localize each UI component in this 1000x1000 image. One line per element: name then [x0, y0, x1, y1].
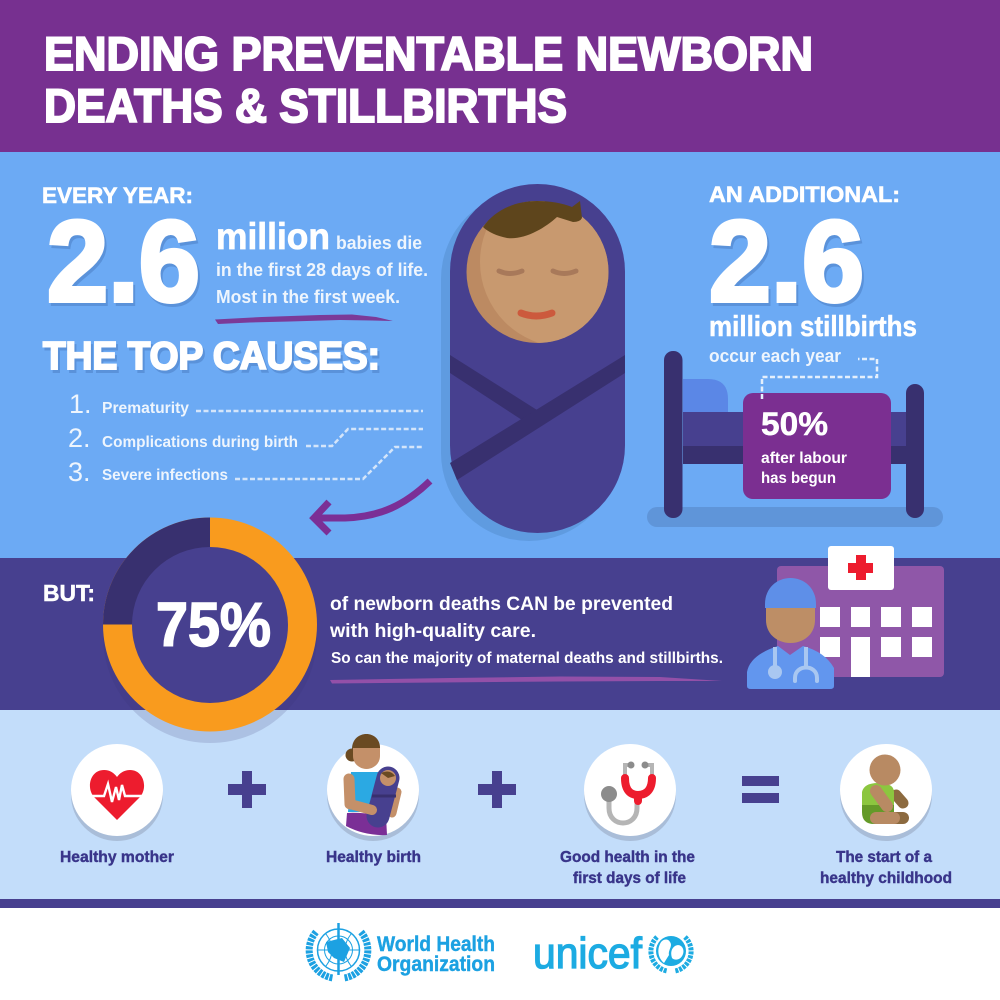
item: healthy mother	[60, 744, 174, 866]
title: DEATHS & STILLBIRTHS	[44, 79, 567, 132]
item: good health: first days of life	[573, 870, 686, 887]
panel: footer logos	[309, 923, 691, 978]
icon: plus	[478, 771, 516, 808]
icon: mother and baby	[346, 734, 397, 835]
text block: stillbirths	[709, 311, 917, 366]
icon: bed	[647, 351, 943, 527]
cause 1: 1.	[69, 389, 92, 419]
cause 2: Complications during birth	[102, 434, 298, 451]
icon: equals	[742, 776, 779, 803]
logo: WHO wordmark: Organization	[377, 953, 495, 976]
cause 1: Prematurity	[102, 400, 189, 417]
item: healthy childhood	[820, 744, 952, 887]
cause 3	[68, 447, 423, 487]
big number: 2.6 million: 2.6	[709, 198, 864, 326]
logo: WHO wordmark: World Health	[377, 933, 495, 956]
icon: swaddled baby	[441, 184, 625, 541]
cause 1	[69, 389, 423, 419]
text block: babies die: million	[216, 216, 330, 257]
cause 2: 2.	[68, 423, 91, 453]
heading: every year: EVERY YEAR:	[42, 183, 193, 208]
brush underline	[215, 314, 393, 324]
item: good health	[560, 744, 695, 887]
logo: WHO emblem	[309, 923, 368, 978]
panel: prevention band	[43, 518, 944, 743]
panel: healthy childhood equation	[60, 734, 952, 887]
cause 3: 3.	[68, 457, 91, 487]
heading: an additional: AN ADDITIONAL:	[709, 182, 900, 207]
item: healthy birth: Healthy birth	[326, 849, 421, 866]
brush underline	[330, 676, 722, 684]
cause 2	[68, 423, 423, 453]
callout: 50 percent: after labour	[761, 450, 847, 467]
logo: WHO wordmark	[377, 933, 495, 976]
text block: prevention: of newborn deaths CAN be prevented	[330, 594, 673, 615]
callout: 50 percent	[743, 359, 891, 499]
item: healthy mother: Healthy mother	[60, 849, 174, 866]
chart: 75 percent donut	[103, 518, 317, 743]
heading: the top causes: THE TOP CAUSES:	[43, 335, 380, 378]
icon: sitting child	[862, 754, 909, 824]
panel: stillbirths statistic	[647, 182, 943, 527]
logo: unicef emblem	[651, 936, 691, 971]
arrow	[314, 481, 430, 533]
cause 3: Severe infections	[102, 467, 228, 484]
text block: babies die	[216, 216, 428, 307]
text block: babies die: in the first 28 days of life.	[216, 260, 428, 280]
callout: 50 percent: has begun	[761, 470, 836, 487]
text block: babies die: Most in the first week.	[216, 287, 400, 307]
big number: 2.6 million: 2.6	[47, 198, 200, 326]
panel: every year statistic	[42, 183, 428, 326]
callout: 50 percent: 50%	[761, 406, 828, 442]
item: good health: Good health in the	[560, 849, 695, 866]
text block: prevention	[329, 594, 723, 667]
panel: top causes	[43, 335, 423, 487]
icon: stethoscope	[601, 762, 652, 823]
chart: 75 percent donut: 75%	[156, 591, 271, 660]
title	[44, 27, 813, 132]
icon: hospital and doctor	[747, 546, 944, 689]
icon: heart	[90, 770, 144, 820]
item: healthy childhood: The start of a	[836, 849, 932, 866]
title: ENDING PREVENTABLE NEWBORN	[44, 27, 813, 80]
item: healthy birth	[326, 734, 421, 866]
item: healthy childhood: healthy childhood	[820, 870, 952, 887]
text block: stillbirths: occur each year	[709, 346, 841, 366]
logo: unicef wordmark: unicef	[533, 929, 643, 978]
text block: babies die: babies die	[336, 233, 422, 253]
text block: prevention: with high-quality care.	[329, 621, 536, 642]
icon: plus	[228, 771, 266, 808]
heading: but: BUT:	[43, 580, 95, 606]
text block: stillbirths: million stillbirths	[709, 311, 917, 343]
text block: prevention: So can the majority of maternal deaths and stillbirths.	[331, 650, 723, 667]
